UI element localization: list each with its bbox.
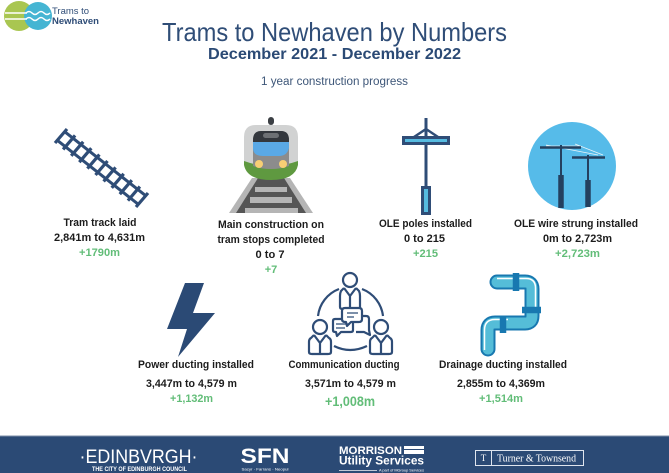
panel: main construction on tram stops: tram stops completed [218,234,324,246]
icon: pipe [484,273,541,350]
logo: Trams to Newhaven: Trams to [52,6,89,16]
panel: OLE wire strung installed [514,122,638,260]
caption: 1 year construction progress: 1 year construction progress [261,76,408,88]
panel: power ducting installed [138,283,254,405]
logo: Morrison Utility Services: MORRISON [339,445,402,457]
panel: power ducting installed: +1,132m [170,393,213,405]
panel: tram track laid: 2,841m to 4,631m [54,232,145,244]
panel: main construction on tram stops: 0 to 7 [256,249,284,261]
icon: lightning bolt [167,283,215,357]
logo: City of Edinburgh Council: THE CITY OF EDINBURGH COUNCIL [92,467,187,473]
panel: OLE wire strung installed: +2,723m [555,248,600,260]
panel: communication ducting [288,273,400,409]
icon: tram on track [229,117,313,213]
panel: OLE wire strung installed: 0m to 2,723m [543,233,612,245]
icon: wires on poles [528,122,616,210]
label: tram track laid: Tram track laid [64,217,136,229]
logo: Turner and Townsend: T [481,453,487,463]
logo: Morrison Utility Services [339,445,424,472]
logo: Turner and Townsend [476,450,584,466]
label: power ducting installed: Power ducting installed [138,359,254,371]
panel: OLE poles installed: +215 [413,248,438,260]
logo: Trams to Newhaven [4,1,99,31]
label: OLE wire strung installed: OLE wire strung installed [514,218,638,230]
panel: drainage ducting installed [439,273,567,405]
panel: main construction on tram stops: +7 [265,264,277,276]
panel: tram track laid [54,129,148,259]
logo: City of Edinburgh Council: ·EDINBVRGH· [80,446,198,468]
panel: tram track laid: +1790m [79,247,120,259]
icon: railway track [55,129,148,207]
panel: drainage ducting installed: +1,514m [479,393,523,405]
logo: SFN: SFN [240,445,290,468]
icon: people in conversation [309,273,392,354]
panel: communication ducting: 3,571m to 4,579 m [305,378,396,390]
footer band [0,436,669,473]
label: drainage ducting installed: Drainage ducting installed [439,359,567,371]
label: OLE poles installed: OLE poles installed [379,218,472,230]
logo: Turner and Townsend: Turner & Townsend [497,454,576,464]
icon: OLE pole [402,118,450,215]
panel: drainage ducting installed: 2,855m to 4,369m [457,378,545,390]
label: main construction on tram stops completed: Main construction on [218,219,324,231]
panel: communication ducting: +1,008m [325,394,375,409]
logo: Trams to Newhaven: Newhaven [52,16,99,27]
logo: Morrison Utility Services: A part of MGroup Services [379,468,424,472]
panel: power ducting installed: 3,447m to 4,579 m [146,378,237,390]
panel: OLE poles installed [379,118,472,260]
logo: Morrison Utility Services: Utility Services [339,454,424,468]
title: Trams to Newhaven by Numbers [162,17,507,47]
logo: SFN: Sacyr · Farrans · Neopul [242,466,289,472]
panel: OLE poles installed: 0 to 215 [404,233,445,245]
label: communication ducting: Communication ducting [288,359,400,371]
subtitle: date range: December 2021 - December 2022 [208,46,461,63]
panel: main construction on tram stops [218,117,324,276]
